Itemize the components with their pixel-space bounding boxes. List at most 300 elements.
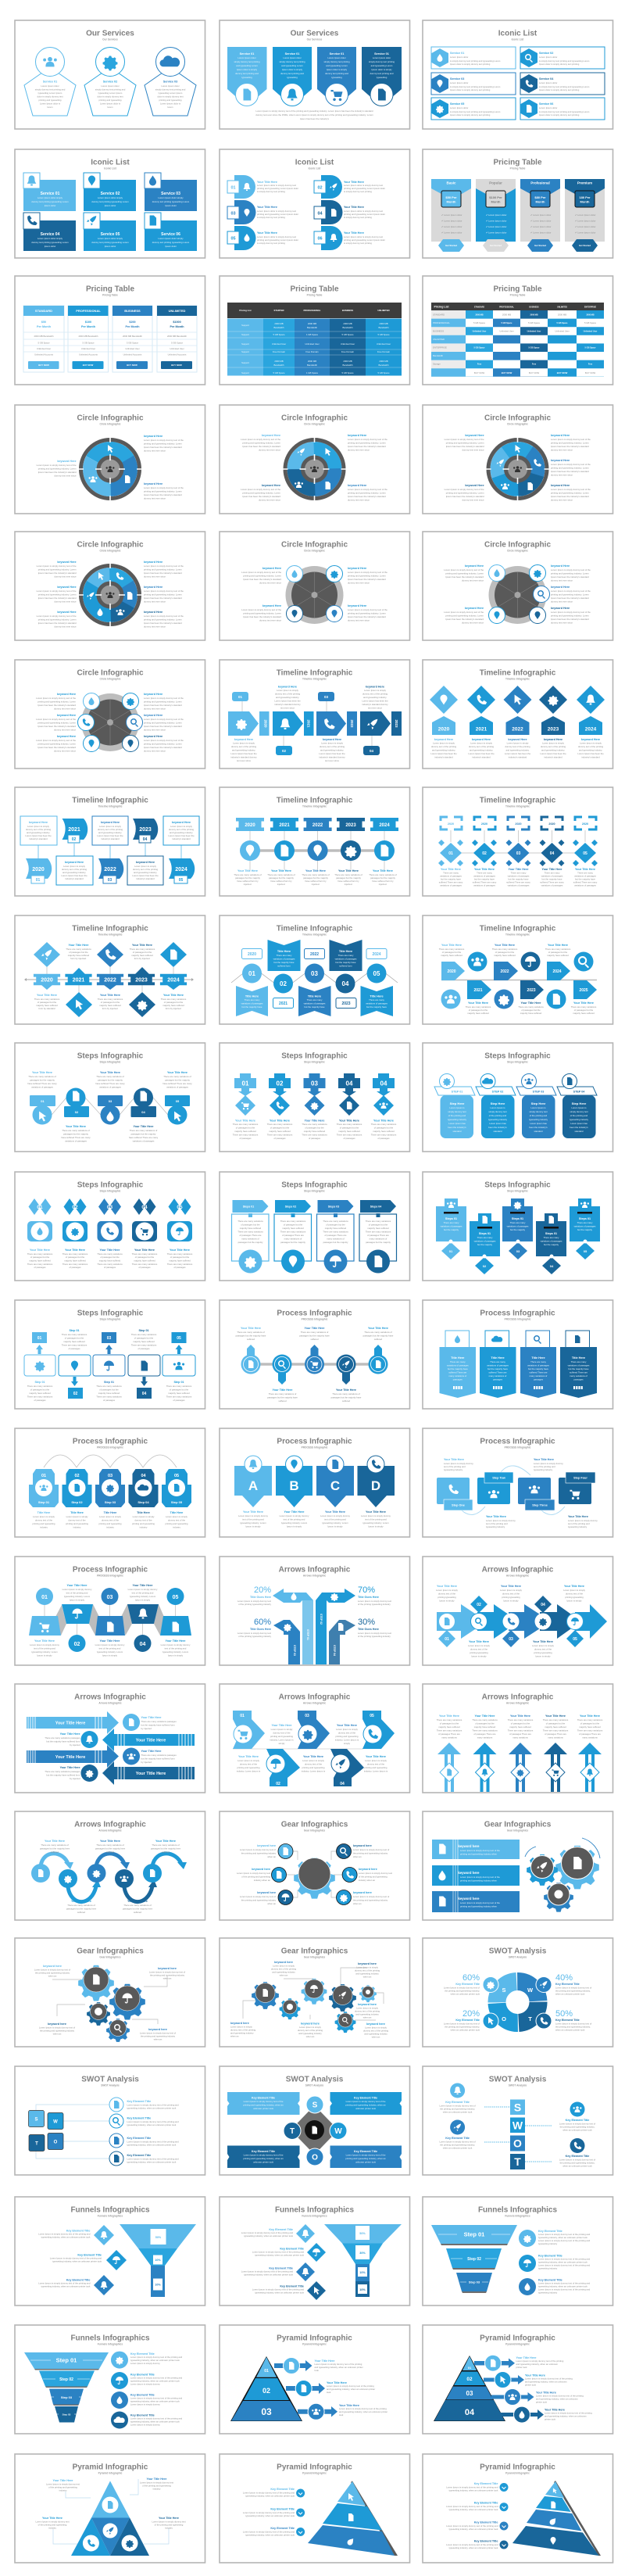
keyword blocks: keyword Here — [57, 460, 77, 463]
service 02: lorem — [108, 106, 113, 109]
steps — [434, 1074, 597, 1138]
list text — [38, 2230, 102, 2288]
keyword blocks: Lorem Ipsum is simply — [134, 865, 157, 868]
text blocks: There are many variations of — [96, 1843, 124, 1847]
keyword blocks: dummy text ever since — [54, 729, 76, 732]
subheading: Pricing Table — [510, 294, 526, 297]
keyword blocks: industry's standard dummy — [274, 703, 301, 706]
service grid: Lorem Ipsum dolor — [539, 56, 557, 59]
service grid: Service 02 — [539, 52, 553, 55]
chevrons: 02 — [276, 1782, 280, 1786]
list text: Your Title Here — [327, 2381, 347, 2384]
text blocks: of passages — [273, 1137, 286, 1140]
timeline flags: 2024 — [175, 867, 188, 872]
text blocks: of passages but the — [305, 1126, 324, 1129]
text blocks: Your Title Here — [69, 944, 88, 947]
text blocks: of passages but the — [374, 1126, 394, 1129]
text blocks: majority have suffered — [29, 1392, 51, 1395]
text blocks: text of the printing and — [165, 1646, 187, 1650]
keyword blocks: Lorem Ipsum has been the — [505, 752, 531, 755]
text blocks: There are many variations of — [332, 1392, 360, 1395]
keyword blocks: Ipsum has been the industry's standard — [551, 597, 589, 600]
keyword blocks: keyword Here — [472, 738, 491, 741]
panel: Circle Infographic four segments — [220, 405, 409, 514]
process squares: Step One — [452, 1504, 465, 1507]
text blocks: majority have suffered — [545, 1725, 566, 1729]
text blocks: of passages but the — [134, 1337, 154, 1340]
step blocks: variations of passages — [574, 1224, 596, 1227]
text blocks: Your Title Here — [510, 1714, 530, 1718]
service grid: Service 05 — [450, 102, 464, 106]
table: Free Domain — [305, 350, 319, 353]
text blocks: printing and typesetting — [132, 1522, 155, 1525]
text blocks: form by injected. — [102, 1007, 118, 1010]
keyword blocks: Lorem Ipsum has been the — [319, 752, 345, 755]
text blocks: Your Title Here — [270, 1120, 290, 1123]
text blocks: variations of passages — [65, 1140, 88, 1143]
text blocks: Your Title Here — [548, 944, 568, 947]
process tags: Title Here — [531, 1356, 545, 1360]
list text: typesetting industry, when an unknown printer took — [41, 2236, 91, 2239]
keyword blocks: dummy text ever since — [551, 449, 573, 452]
keyword blocks: dummy text ever since — [55, 575, 77, 579]
keyword blocks: keyword here — [252, 1868, 270, 1871]
keyword blocks: text ever since — [237, 759, 251, 762]
text blocks: passages but the majority — [269, 876, 295, 880]
text blocks: Your Title Here — [271, 869, 291, 872]
percent blocks: Key Element Title — [555, 2019, 580, 2022]
keyword blocks: dummy text ever since — [55, 474, 77, 477]
text blocks: typesetting industry. Lorem — [31, 1650, 58, 1653]
text blocks: Lorem Ipsum is simply — [563, 1589, 586, 1592]
numbered items: 02 — [317, 186, 323, 191]
panel: Pricing Table dark header — [220, 276, 409, 385]
table: PROFESSIONAL — [499, 306, 514, 308]
text blocks: of passages but the — [580, 1722, 600, 1725]
text blocks: have suffered form by — [270, 880, 292, 883]
keyword blocks: keyword Here — [144, 735, 162, 738]
text blocks: of passages — [309, 1137, 321, 1140]
list text — [243, 2488, 295, 2536]
text blocks: have suffered There are many — [95, 1082, 125, 1085]
list text: typesetting industry, when an unknown printer took — [127, 2144, 177, 2147]
list text: Your Title Here — [339, 2404, 359, 2407]
list text: Your Title Here — [525, 2374, 545, 2377]
process tags: There are many — [450, 1360, 466, 1363]
keyword blocks: printing and typesetting industry. Lorem — [551, 593, 589, 596]
keyword blocks: keyword Here — [144, 586, 162, 589]
keyword blocks: Lorem Ipsum is simply dummy text of the — [36, 718, 76, 721]
chevrons: 04 — [340, 1782, 345, 1786]
process squares: Step Three — [532, 1504, 548, 1507]
text blocks: There are many variations — [131, 1333, 157, 1336]
keyword blocks: Ipsum has been the industry's standard — [38, 704, 76, 707]
text blocks: Lorem Ipsum is simply dummy — [320, 1514, 350, 1517]
text blocks: Your Title Here — [65, 1249, 85, 1252]
list text: Key Element Title — [270, 2508, 295, 2511]
triangle chart — [53, 2479, 169, 2556]
step blocks: but the majority — [510, 1228, 526, 1231]
keyword blocks — [430, 738, 604, 758]
heading: Circle Infographic — [484, 414, 551, 422]
text blocks: Title Here — [70, 1511, 84, 1514]
text blocks: printing and typesetting — [238, 1766, 260, 1769]
steps: Step Here — [450, 1102, 465, 1105]
timeline: There are many — [245, 998, 260, 1001]
table: 2000 MB — [379, 322, 388, 325]
timeline: 2024 — [167, 977, 180, 983]
list text: Key Element Title — [270, 2488, 295, 2491]
service grid: Service 06 — [539, 102, 553, 106]
price columns: ✔ Lorem Ipsum dolor — [486, 219, 507, 222]
text blocks: There are many variations — [27, 1263, 53, 1266]
text blocks: by injected — [141, 1727, 152, 1730]
list text: Lorem Ipsum is simply dummy text of the printing — [327, 2384, 374, 2388]
text blocks: majority have suffered — [162, 1004, 184, 1007]
text blocks: There are many variations — [62, 1333, 88, 1336]
swot ring: O — [502, 2015, 506, 2022]
keyword blocks — [36, 693, 184, 752]
keyword blocks: Lorem Ipsum is simply — [470, 741, 493, 744]
text blocks: suffered — [77, 1911, 85, 1914]
text blocks: There are many variations passages — [45, 1736, 80, 1739]
process steps: Step 04 — [138, 1500, 149, 1504]
service cards: Ipsum dolor — [45, 245, 55, 248]
steps: 02 — [75, 1110, 79, 1114]
service cards: dummy text printing typesetting Lorem — [91, 200, 129, 203]
keyword blocks: Ipsum has been the industry's standard — [242, 495, 280, 498]
text blocks: There are many variations passages — [45, 1770, 80, 1773]
text blocks — [40, 1840, 181, 1914]
keyword blocks: Lorem Ipsum is simply dummy text of the — [241, 608, 281, 611]
four service columns: Lorem Ipsum dolor — [373, 56, 391, 59]
text blocks: of passages but the — [30, 1388, 50, 1392]
chained arrows: 01 — [445, 1637, 449, 1642]
keyword blocks: keyword Here — [278, 685, 297, 688]
keyword blocks: dummy text of the printing — [26, 828, 52, 831]
text blocks: of passages — [68, 1347, 80, 1350]
heading: Timeline Infographic — [480, 924, 556, 933]
timeline: 2020 — [515, 822, 522, 826]
percent blocks: Lorem Ipsum is simply dummy text — [238, 1632, 271, 1635]
text blocks: majority have suffered — [36, 1004, 58, 1007]
steps: typesetting industry — [529, 1118, 548, 1121]
text blocks: suffered — [134, 1911, 141, 1914]
list text: typesetting industry, when an unknown printer took — [245, 2514, 295, 2517]
keyword blocks: Lorem Ipsum is simply dummy text of the — [144, 718, 184, 721]
steps: typesetting industry — [570, 1118, 589, 1121]
text blocks: typesetting industry. Lorem — [362, 1521, 389, 1524]
subheading: Timeline Infographic — [302, 933, 327, 937]
keyword blocks: keyword Here — [551, 607, 570, 610]
service 03: dolor is simply dummy text — [158, 95, 184, 99]
text blocks: dummy text of the — [168, 1518, 186, 1521]
service 02: dolor is simply dummy text — [98, 95, 123, 99]
text blocks: There are many variations of — [123, 1904, 152, 1907]
step tiles: 01 — [38, 1336, 41, 1341]
swot squares: W — [53, 2120, 58, 2125]
timeline: but the majority have — [305, 1005, 325, 1009]
pricing cards: $50 — [41, 321, 46, 324]
list text: Lorem Ipsum is simply dummy text of the printing and — [538, 2281, 591, 2284]
text blocks: passages but the majority have — [331, 1396, 362, 1399]
text blocks: typesetting industry — [444, 1468, 463, 1471]
text blocks: variations of passages — [440, 874, 462, 877]
keyword blocks: dummy text of the printing — [431, 745, 457, 748]
keyword blocks: keyword Here — [144, 714, 162, 717]
panel: Pricing Table checkerboard — [423, 276, 612, 385]
price columns: 180 Per — [579, 195, 591, 199]
text blocks: There are many variations — [167, 1252, 193, 1256]
keyword blocks: Ipsum has been the industry's standard — [38, 571, 77, 575]
keyword blocks: Lorem Ipsum is simply dummy text of the — [348, 438, 388, 441]
text blocks: There are many variations of — [62, 1129, 90, 1132]
text blocks: Ipsum is simply — [368, 1524, 384, 1528]
numbered items: Lorem Ipsum dolor is simply dummy text — [344, 235, 383, 238]
service grid: Ipsum dolor is simply dummy text printing — [539, 63, 580, 66]
service 03: simply dummy text printing and — [155, 88, 186, 91]
text blocks: have suffered form by — [238, 880, 259, 883]
panel: Iconic List tabs — [15, 149, 205, 258]
pricing cards: Unlimited Accounts — [123, 353, 142, 356]
list text: typesetting industry, when an unknown printer took — [538, 2284, 588, 2288]
table: 2000 MB — [308, 360, 316, 363]
heading: Circle Infographic — [77, 541, 144, 549]
step blocks: There are many — [577, 1221, 593, 1224]
text blocks: of passages but the — [133, 951, 152, 954]
keyword blocks: keyword Here — [262, 567, 281, 570]
process tags: but the majority have — [448, 1367, 468, 1370]
keyword blocks: keyword Here — [234, 738, 253, 741]
keyword blocks: and typesetting industry. — [232, 749, 255, 752]
text blocks: passages but the majority here — [40, 1847, 70, 1850]
step blocks: variations of passages — [507, 1224, 529, 1227]
timeline arrows: 03 — [324, 695, 328, 699]
keyword blocks: Lorem Ipsum is simply dummy text of the — [144, 739, 184, 742]
text blocks: of passages but the — [65, 1337, 84, 1340]
timeline: but the majority have — [274, 961, 295, 964]
table: STARTER — [273, 309, 284, 312]
timeline: 2022 — [500, 969, 509, 974]
service 01: Lorem Ipsum dolor is — [40, 102, 61, 105]
list text: typesetting industry, when an unknown printer took — [449, 2489, 498, 2492]
keyword panels: Lorem Ipsum is simply dummy text of the — [460, 1901, 500, 1904]
text blocks: of passages but the — [548, 951, 568, 954]
text blocks: injected. — [244, 883, 252, 886]
heading: Funnels Infographics — [70, 2206, 150, 2214]
text blocks: Your Title Here — [305, 1120, 324, 1123]
chained arrows: 03 — [509, 1637, 513, 1642]
list text: Key Element Title — [538, 2255, 562, 2258]
timeline: There are many — [369, 998, 384, 1001]
list text: and typesetting industry, when an unknown — [525, 2380, 567, 2383]
keyword blocks: keyword Here — [551, 586, 570, 589]
keyword blocks: keyword Here — [29, 821, 48, 824]
funnel steps — [431, 2225, 536, 2295]
pricing cards: 5 GB Space — [82, 341, 95, 344]
keyword blocks — [230, 685, 388, 762]
keyword blocks: and typesetting industry — [355, 1972, 379, 1975]
price columns: ✔ Lorem Ipsum dolor — [441, 225, 462, 228]
text blocks: Your Title Here — [241, 1327, 261, 1330]
panel: Pricing Table hexagon — [423, 149, 612, 258]
process tags: passages — [534, 1378, 544, 1381]
subheading: Arrows Infographic — [98, 1829, 122, 1833]
text blocks: have suffered There are many — [27, 1082, 57, 1085]
service cards: Service 06 — [161, 232, 180, 237]
heading: Arrows Infographic — [482, 1693, 554, 1701]
text blocks: many variations — [548, 1736, 563, 1739]
text blocks: but the majority have suffered form — [46, 1740, 80, 1743]
steps: Lorem Ipsum has — [448, 1122, 466, 1125]
text blocks: passages but the majority have — [299, 1334, 330, 1337]
keyword blocks: text ever since — [280, 707, 295, 710]
text blocks — [234, 869, 397, 886]
percent blocks: 50% — [555, 2009, 573, 2019]
steps — [234, 1073, 395, 1116]
steps: STEP 04 — [573, 1090, 585, 1093]
timeline flags: 2020 — [32, 867, 45, 872]
list text: the printing and typesetting industry, — [560, 2161, 595, 2164]
heading: Gear Infographics — [77, 1947, 144, 1956]
table: Support — [241, 371, 249, 374]
text blocks: injected. — [345, 883, 352, 886]
text blocks: industry. Lorem Ipsum is — [364, 1770, 388, 1773]
timeline arrows: 2022 — [350, 719, 354, 728]
process tags — [439, 1331, 597, 1398]
percent blocks: Key Element Title — [455, 2019, 480, 2022]
list text: Lorem Ipsum is simply dummy text of the printing and — [130, 2417, 183, 2420]
steps: 02 — [72, 1205, 78, 1210]
keyword blocks: dummy text of the printing — [469, 745, 495, 748]
service cards: dummy text printing typesetting Lorem — [91, 241, 129, 244]
service 01: dolor is simply dummy text — [38, 95, 63, 99]
table: Bandwidth — [342, 326, 353, 329]
keyword blocks: text ever since — [325, 759, 339, 762]
keyword blocks: Lorem Ipsum is simply dummy text — [359, 1872, 392, 1875]
text blocks: have suffered form by — [305, 880, 327, 883]
timeline — [236, 818, 398, 870]
percent blocks: 60% — [254, 1618, 271, 1627]
text blocks: injected. — [379, 883, 387, 886]
four service columns: dummy text printing and — [280, 72, 304, 75]
list text: the printing and typesetting industry, — [560, 2125, 595, 2128]
service cards: Lorem Ipsum dolor simply — [158, 237, 184, 240]
diamonds and year houses: 2024 — [585, 727, 597, 732]
list text: Key Element Title — [66, 2278, 90, 2281]
text blocks: of passages but the — [511, 1722, 530, 1725]
text blocks: printing typesetting — [502, 1596, 520, 1599]
keyword blocks: industry when an — [254, 1879, 270, 1882]
keyword blocks: of the printing and typesetting — [241, 1875, 270, 1878]
keyword blocks: keyword here — [359, 1868, 377, 1871]
list text: Key Element Title — [280, 2247, 304, 2250]
text blocks: Your Title Here — [368, 1327, 388, 1330]
text blocks: of passages but the — [440, 1722, 459, 1725]
list text: Lorem Ipsum is simply dummy text of the printing and — [243, 2530, 295, 2533]
subheading: Gear Infographics — [304, 1956, 325, 1959]
keyword blocks: and typesetting industry — [298, 2032, 322, 2035]
table: 5 GB Space — [474, 347, 485, 349]
pricing cards: Per Month — [125, 325, 140, 328]
subheading: PROCESS Infographic — [505, 1446, 531, 1449]
text blocks: of passages — [343, 1137, 355, 1140]
table: 2000 MB — [274, 322, 284, 325]
list text: Key Element Title — [474, 2502, 498, 2505]
text blocks: There are many variations — [130, 948, 155, 951]
heading: Timeline Infographic — [277, 669, 353, 677]
keyword blocks: dummy text ever since — [144, 729, 166, 732]
numbered items: 03 — [230, 211, 236, 216]
list text: industry — [153, 2488, 161, 2491]
text blocks: Your Title Here — [521, 1001, 541, 1005]
percent blocks — [238, 1585, 391, 1638]
text blocks — [436, 1585, 586, 1657]
text blocks: majority have suffered — [99, 1004, 121, 1007]
percent blocks: the printing and typesetting industry, — [555, 1989, 591, 1992]
percent blocks: Title Goes Here — [250, 1596, 271, 1599]
text blocks: variations of passages — [574, 874, 597, 877]
pyramid: 01 — [468, 2366, 472, 2370]
panel: Process tags with icons — [423, 1300, 612, 1409]
list text: typesetting industry, when an unknown printer took — [130, 2380, 180, 2383]
percent blocks: Lorem Ipsum is simply dummy text of — [444, 1986, 480, 1989]
timeline flags: 2021 — [68, 827, 80, 833]
swot letters: T — [514, 2155, 521, 2168]
text blocks: majority have suffered — [134, 1259, 155, 1262]
keyword blocks: and typesetting industry — [272, 1970, 295, 1973]
text blocks: There are many variations — [233, 1134, 259, 1137]
panel: Process arcs — [15, 1428, 205, 1537]
steps — [27, 1198, 192, 1241]
keyword blocks: printing and typesetting industry. Lorem — [144, 743, 182, 746]
heading: Gear Infographics — [281, 1820, 348, 1829]
keyword blocks: industry's standard — [101, 837, 120, 840]
swot ring: W — [527, 1987, 534, 1994]
table: 5 GB Space — [557, 322, 568, 324]
text blocks: dummy text of the — [35, 1518, 53, 1521]
service 01: printing and typesetting — [39, 99, 62, 102]
step columns: passages but the majority — [238, 1241, 263, 1244]
text blocks: There are many variations — [132, 1263, 158, 1266]
text blocks: Your Title Here — [336, 1388, 356, 1392]
list text: typesetting industry, when an unknown printer took — [244, 2234, 294, 2237]
keyword blocks: Ipsum has been the industry's standard — [243, 578, 281, 581]
four service columns: typesetting — [287, 76, 298, 79]
keyword blocks — [37, 435, 184, 500]
swot squares: T — [35, 2142, 38, 2147]
keyword blocks: dummy text ever since — [144, 575, 166, 579]
percent blocks: 20% — [254, 1585, 271, 1595]
service cards: Ipsum dolor — [165, 204, 177, 207]
timeline: variations of passages — [366, 1002, 388, 1005]
list text: Lorem Ipsum is simply dummy text of the printing and — [538, 2233, 591, 2236]
panel: Timeline ribbons and circles — [220, 787, 409, 896]
subheading: Iconic List — [104, 167, 117, 170]
footer paragraph: dummy text ever since the 1500s, when Lorem Ipsum is simply dummy text of the printing and typesetting industry. Lorem — [255, 113, 373, 116]
list text: Lorem Ipsum is simply dummy text — [46, 2483, 80, 2486]
step columns: There are many variations — [366, 1220, 391, 1223]
text blocks: Step 01 — [69, 1329, 80, 1332]
step columns: of passages There are — [325, 1234, 347, 1237]
table: 5 GB Space — [377, 371, 390, 374]
heading: Arrows Infographic — [74, 1693, 146, 1701]
swot hub and panels: Key Element Title — [252, 2150, 275, 2153]
step columns: of passages but the — [284, 1223, 303, 1226]
text blocks: Ipsum is simply — [535, 1654, 551, 1657]
text blocks: of passages but the — [495, 951, 515, 954]
numbered items: Lorem Ipsum dolor is simply dummy text — [257, 235, 296, 238]
